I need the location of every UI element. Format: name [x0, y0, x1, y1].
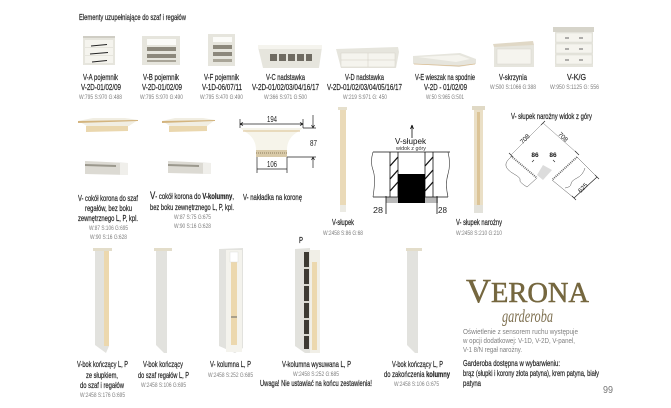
item: V-K/G: W:950 S:1125 G: 556 [550, 84, 599, 91]
dimension drawing: crown overlay [240, 115, 317, 173]
item: V-A pojemnik: V-2D-01/02/09 [81, 83, 121, 92]
diagram: corner pillar seen from above: V- słupek narożny widok z góry [511, 112, 593, 121]
item: V-K/G: V-K/G [567, 73, 586, 82]
item: V-kolumna wysuwana: V-kolumna wysuwana L, P [282, 360, 351, 369]
diagram: V-słupek seen from above: 28 [373, 206, 384, 215]
dimension drawing: crown overlay: 106 [267, 160, 277, 169]
item: V-E wieszak: W:50 S:965 G:501 [426, 94, 464, 101]
diagram: corner pillar seen from above: 86 [531, 152, 539, 159]
item: V-skrzynia [490, 41, 536, 91]
text block: lighting note [462, 329, 578, 354]
item: V-bok kończący do szaf regałów: V-bok kończący [143, 360, 184, 369]
icon: corner pillar [472, 106, 485, 213]
item: V-bok kończący do kolumny: do zakończenia kolumny [384, 370, 450, 379]
item: V-B pojemnik: W:795 S:970 G:490 [140, 94, 183, 101]
item: cokół korona do szaf: W:87 S:106 G:695 [89, 225, 128, 232]
text block: available finishes: patyna [463, 379, 481, 388]
item: V-słupek narożny: W:2458 S:210 G:210 [456, 230, 502, 237]
diagram: corner pillar seen from above: 708 [519, 133, 532, 146]
icon: end panel for column [406, 248, 422, 353]
item: V-A pojemnik [79, 36, 122, 101]
item: V-B pojemnik: V-2D-01/02/09 [142, 83, 182, 92]
item: cokół korona do szaf: W:90 S:16 G:628 [90, 234, 127, 241]
item: V-E wieszak: V-E wieszak na spodnie [415, 73, 475, 82]
icon: end panel [154, 248, 172, 353]
dimension drawing: crown overlay: 194 [267, 115, 277, 124]
icon: V-D top unit [336, 47, 399, 68]
title: Elementy uzupełniające do szaf i regałów [79, 13, 186, 22]
item: V-bok kończący do szaf regałów: W:2458 S:106 G:695 [141, 382, 186, 389]
text block: lighting note: V-1 8/N regał narożny. [463, 347, 522, 354]
item: cokół korona do szaf [78, 118, 139, 241]
diagram: V-słupek seen from above: 28 [438, 206, 448, 215]
diagram: corner pillar seen from above: 625 [577, 182, 590, 195]
item: V-F pojemnik [200, 34, 243, 101]
item: V-F pojemnik: V-F pojemnik [204, 73, 240, 82]
item: cokół korona do kolumny: W:87 S:75 G:675 [174, 214, 211, 221]
item: V-bok kończący do kolumny [384, 248, 450, 388]
icon: end panel with pillar [93, 248, 112, 353]
diagram: corner pillar seen from above: 708 [556, 131, 569, 144]
icon: V-B shelves [142, 36, 180, 65]
item: V-kolumna [208, 248, 253, 379]
item: V-B pojemnik [140, 36, 183, 101]
icon: crown and plinth [78, 118, 138, 175]
item: V-C nadstawka [252, 45, 322, 101]
item: V-kolumna: V- kolumna L, P [210, 360, 251, 369]
icon: V-A container [83, 36, 115, 65]
item: V-słupek [323, 107, 363, 237]
item: V-D nadstawka: V-2D-01/02/03/04/05/16/17 [327, 83, 402, 92]
item: V-D nadstawka: V-D nadstawka [345, 73, 384, 82]
icon: column [219, 248, 243, 353]
item: V-D nadstawka [327, 47, 402, 101]
item: V-skrzynia: W:500 S:1066 G:388 [490, 84, 536, 91]
item: V-bok kończący ze słupkiem: do szaf i regałów [80, 381, 124, 390]
item: V-kolumna wysuwana [260, 236, 372, 388]
item: cokół korona do kolumny: W:90 S:16 G:628 [174, 223, 211, 230]
item: V-C nadstawka: V-2D-01/02/03/04/16/17 [252, 83, 319, 92]
item: V-C nadstawka: V-C nadstawka [266, 73, 305, 82]
diagram: V-słupek seen from above: widok z góry [396, 146, 427, 152]
item: V-B pojemnik: V-B pojemnik [143, 73, 180, 82]
text block: available finishes: brąz (słupki i korony złota patyna), krem patyna, biały [463, 369, 600, 378]
item: V-kolumna wysuwana: Uwaga! Nie ustawiać na końcu zestawienia! [260, 379, 372, 388]
item: V-skrzynia: V-skrzynia [499, 73, 527, 82]
item: V-F pojemnik: V-1D-06/07/11 [202, 83, 242, 92]
item: V-słupek: V-słupek [332, 218, 355, 227]
item: nakładka na koronę [240, 115, 317, 202]
item: V-E wieszak [413, 53, 476, 101]
item: V-bok kończący ze słupkiem: V-bok kończący L, P [77, 360, 128, 369]
diagram: corner pillar seen from above [506, 112, 599, 200]
item: V-A pojemnik: V-A pojemnik [83, 73, 119, 82]
item: V-kolumna wysuwana: P [299, 236, 303, 245]
item: cokół korona do kolumny [150, 118, 234, 230]
item: nakładka na koronę: V- nakładka na koronę [243, 193, 302, 202]
text block: lighting note: w opcji dodatkowej: V-1D, V-2D, V-panel, [462, 338, 575, 345]
text block: available finishes: Garderoba dostępna w wybarwieniu: [463, 359, 560, 368]
item: V-słupek: W:2458 S:86 G:68 [323, 230, 363, 237]
brand logo: Verona [466, 273, 590, 326]
icon: slim pillar [338, 107, 347, 212]
brand logo: Verona: VERONA [466, 273, 590, 310]
page number: 99 [603, 385, 613, 396]
icon: V-F shelves [208, 34, 235, 66]
item: V-słupek narożny: V- słupek narożny [456, 218, 503, 227]
icon: pull-out column [295, 248, 320, 353]
icon: chest of drawers [553, 27, 594, 67]
item: V-bok kończący do kolumny: V-bok kończący L, P [392, 360, 443, 369]
diagram: V-słupek seen from above: V-słupek [395, 137, 427, 146]
item: V-A pojemnik: W:795 S:970 G:488 [79, 94, 122, 101]
text block: lighting note: Oświetlenie z sensorem ruchu występuje [463, 329, 578, 336]
item: cokół korona do kolumny: bez boku zewnętrznego L, P, kpl. [150, 203, 234, 212]
item: cokół korona do szaf: regałów, bez boku [85, 204, 132, 213]
icon: V-C top unit [258, 45, 322, 68]
item: cokół korona do szaf: zewnętrznego L, P, kpl. [78, 214, 138, 223]
item: V-F pojemnik: W:795 S:470 G:490 [200, 94, 243, 101]
icon: V-E trouser rack [413, 53, 476, 67]
item: V-bok kończący do kolumny: W:2458 S:106 G:675 [394, 381, 439, 388]
diagram: V-słupek seen from above [372, 125, 450, 215]
icon: chest [493, 41, 534, 67]
item: V-K/G [550, 27, 599, 91]
item: V-bok kończący ze słupkiem [77, 248, 128, 399]
item: V-E wieszak: V-2D - 01/02/09 [424, 83, 467, 92]
item: V-bok kończący do szaf regałów [138, 248, 189, 389]
item: V-bok kończący ze słupkiem: W:2458 S:176 G:695 [80, 392, 125, 399]
icon: crown and plinth for column [162, 118, 215, 174]
item: V-kolumna wysuwana: W:2458 S:252 G:685 [293, 371, 339, 378]
diagram: corner pillar seen from above: 86 [549, 152, 557, 159]
item: cokół korona do szaf: V- cokół korona do szaf [78, 194, 139, 203]
item: V-bok kończący do szaf regałów: do szaf regałów L, P [138, 371, 189, 380]
item: V-słupek narożny [456, 106, 503, 237]
item: V-bok kończący ze słupkiem: ze słupkiem, [86, 371, 118, 380]
item: cokół korona do kolumny: V- cokół korona do V-kolumny, [150, 190, 234, 202]
text block: available finishes [463, 359, 600, 388]
item: V-C nadstawka: W:366 S:971 G:500 [264, 94, 307, 101]
dimension drawing: crown overlay: 87 [310, 139, 317, 148]
item: V-D nadstawka: W:219 S:971 G: 450 [343, 94, 387, 101]
brand logo: Verona: garderoba [502, 306, 553, 326]
item: V-kolumna: W:2458 S:252 G:685 [208, 372, 253, 379]
